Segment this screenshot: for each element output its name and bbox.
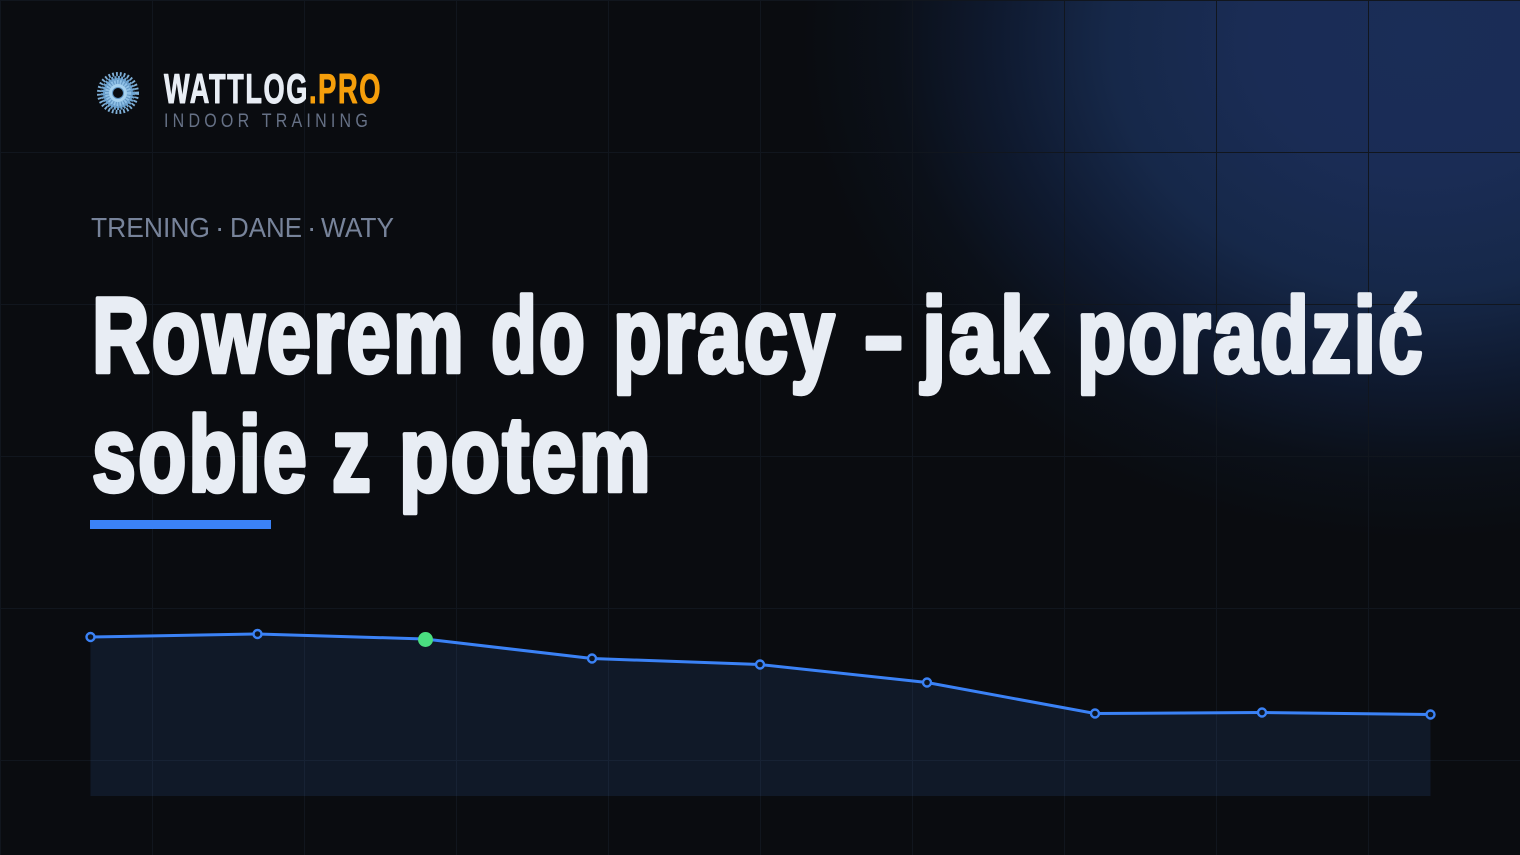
title: z [332,394,373,514]
title: potem [399,394,653,514]
title [92,275,1425,514]
eyebrow: · [307,212,316,243]
chart line [90,634,1430,714]
title: pracy [613,275,837,395]
icon: cassette gear [99,74,137,112]
highlighted marker [418,632,433,647]
title: jak [920,275,1051,395]
logo tagline: INDOOR TRAINING [164,111,372,132]
eyebrow: · [215,212,224,243]
logo wordmark: WATTLOG [164,65,309,112]
title underline [90,520,271,529]
eyebrow [91,212,394,243]
chart markers [86,630,1434,718]
title: Rowerem [92,275,466,395]
logo [99,65,382,132]
title: do [491,275,587,395]
line chart [86,630,1434,796]
eyebrow: DANE [230,212,302,243]
logo wordmark: .PRO [309,65,382,112]
eyebrow: WATY [321,212,394,243]
eyebrow: TRENING [91,212,210,243]
title: sobie [92,394,309,514]
chart area fill [90,634,1430,796]
title: – [865,275,904,395]
